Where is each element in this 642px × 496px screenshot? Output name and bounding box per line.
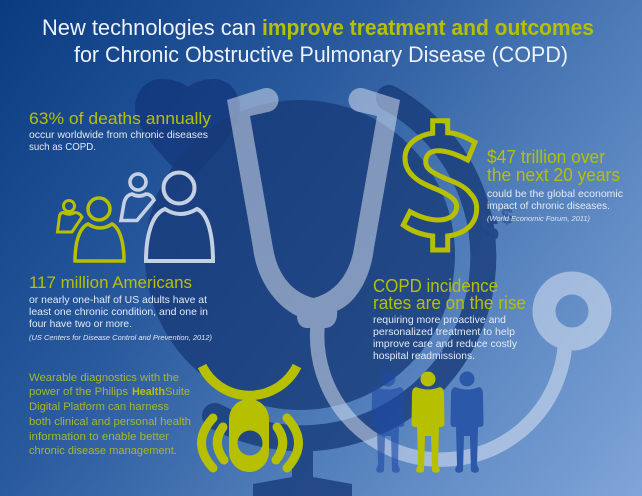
- text block: 117 million Americans: [29, 273, 212, 342]
- icon: small background dollar signs: $: [501, 204, 513, 229]
- text block: wearable diagnostics: Suite: [165, 386, 190, 398]
- text block: $47 trillion: impact of chronic diseases.: [487, 200, 610, 212]
- icon: small background dollar signs: $: [480, 211, 499, 249]
- text block: 63% of deaths: [29, 109, 212, 153]
- text block: $47 trillion: could be the global economic: [487, 188, 623, 200]
- text block: $47 trillion: [487, 147, 623, 223]
- text block: COPD incidence: [373, 276, 526, 362]
- title: for Chronic Obstructive Pulmonary Disease (COPD): [74, 42, 568, 67]
- icon: large yellow person: [75, 198, 124, 261]
- text block: wearable diagnostics: information to enable better: [29, 431, 169, 443]
- icon: large white person: [146, 172, 213, 261]
- text block: 117 million Americans: least one chronic condition, and one in: [29, 306, 208, 318]
- text block: COPD incidence: hospital readmissions.: [373, 350, 475, 362]
- text block: wearable diagnostics: Health: [132, 386, 165, 398]
- title: New technologies can: [42, 15, 256, 40]
- text block: $47 trillion: $47 trillion over: [487, 147, 605, 167]
- text block: wearable diagnostics: both clinical and personal health: [29, 416, 191, 428]
- text block: $47 trillion: the next 20 years: [487, 165, 620, 185]
- text block: 117 million Americans: or nearly one-half of US adults have at: [29, 294, 207, 306]
- dark stethoscope backdrop: disc, tube and stand: [145, 98, 483, 496]
- icon: blue person left: [372, 372, 404, 473]
- text block: wearable diagnostics: power of the Philips: [29, 386, 129, 398]
- icon: small yellow person: [58, 200, 82, 232]
- text block: 63% of deaths: such as COPD.: [29, 141, 96, 153]
- text block: COPD incidence: personalized treatment to help: [373, 326, 515, 338]
- text block: COPD incidence: requiring more proactive and: [373, 314, 506, 326]
- text block: 117 million Americans: (US Centers for Disease Control and Prevention, 2012): [29, 333, 212, 342]
- text block: COPD incidence: COPD incidence: [373, 276, 498, 296]
- icon: heart: [135, 79, 240, 182]
- icon: small white person: [121, 174, 154, 220]
- text block: wearable diagnostics: [29, 372, 191, 457]
- text block: COPD incidence: improve care and reduce costly: [373, 338, 518, 350]
- icon: wearable sensor: [202, 366, 298, 472]
- text block: wearable diagnostics: chronic disease management.: [29, 445, 177, 457]
- text block: wearable diagnostics: Digital Platform can harness: [29, 401, 170, 413]
- icon: small and large people outlines: [58, 172, 213, 261]
- icon: yellow person centre: [412, 372, 444, 473]
- text block: 63% of deaths: 63% of deaths annually: [29, 109, 212, 128]
- text block: 117 million Americans: four have two or more.: [29, 318, 132, 330]
- icon: blue person right: [450, 372, 484, 473]
- icon: dollar sign: [403, 121, 477, 250]
- title: improve treatment and outcomes: [262, 15, 594, 40]
- text block: 63% of deaths: occur worldwide from chronic diseases: [29, 129, 208, 141]
- text block: $47 trillion: (World Economic Forum, 2011): [487, 214, 590, 223]
- text block: COPD incidence: rates are on the rise: [373, 293, 526, 313]
- icon: three standing people: [372, 372, 484, 473]
- text block: wearable diagnostics: Wearable diagnostics with the: [29, 372, 179, 384]
- text block: 117 million Americans: 117 million Americans: [29, 273, 192, 292]
- icon: small background dollar signs: [480, 204, 513, 249]
- title: [42, 15, 594, 67]
- stethoscope outline: [227, 88, 600, 460]
